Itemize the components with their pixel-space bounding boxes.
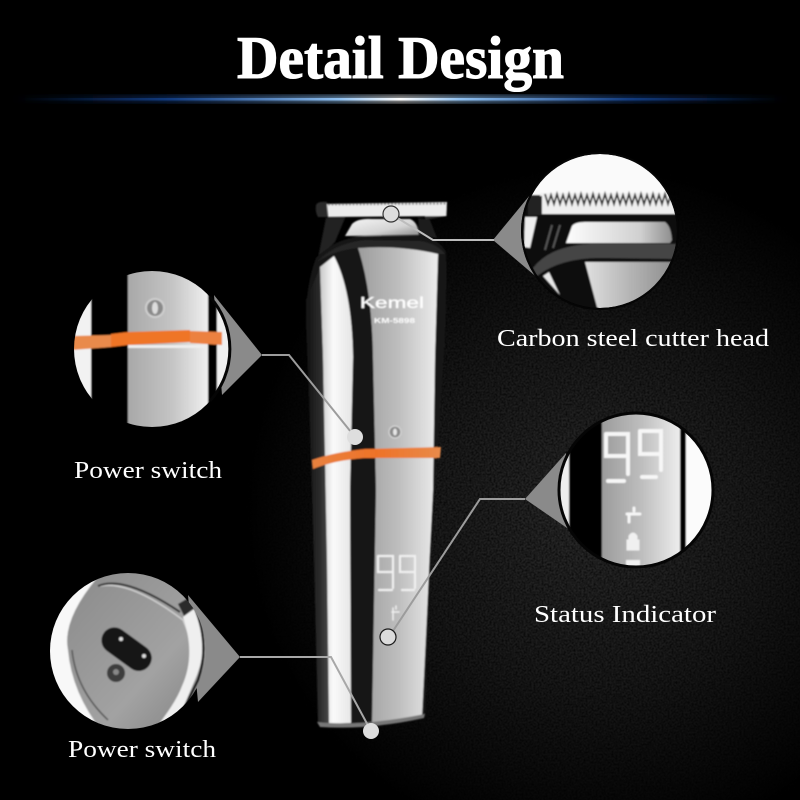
callout line: power switch	[262, 355, 355, 437]
zoom circle: status indicator	[555, 410, 720, 570]
trimmer device	[306, 202, 447, 728]
pointer triangles	[188, 195, 570, 702]
power button	[389, 426, 401, 438]
marker dots	[347, 206, 399, 739]
display digits	[378, 556, 415, 620]
brand logo	[360, 295, 424, 325]
callout line: charging port	[240, 657, 371, 731]
zoom circle: charging port	[50, 573, 206, 729]
zoom circle: power switch	[70, 270, 235, 430]
trimmer body	[306, 236, 446, 728]
label: status indicator: Status Indicator	[534, 602, 716, 628]
title underline glow	[10, 95, 790, 103]
label: power switch upper: Power switch	[74, 458, 222, 484]
zoom circle: cutter head	[521, 154, 676, 310]
callout line: cutter	[391, 214, 494, 240]
orange band	[312, 447, 441, 469]
brand logo: Kemel	[360, 295, 424, 312]
label: carbon steel cutter head: Carbon steel cutter head	[497, 326, 769, 352]
brand logo: KM-5898	[374, 316, 415, 325]
label: power switch lower: Power switch	[68, 737, 216, 763]
callout line: status indicator	[389, 499, 525, 637]
trimmer head	[316, 202, 447, 258]
title: Detail Design	[237, 25, 564, 91]
